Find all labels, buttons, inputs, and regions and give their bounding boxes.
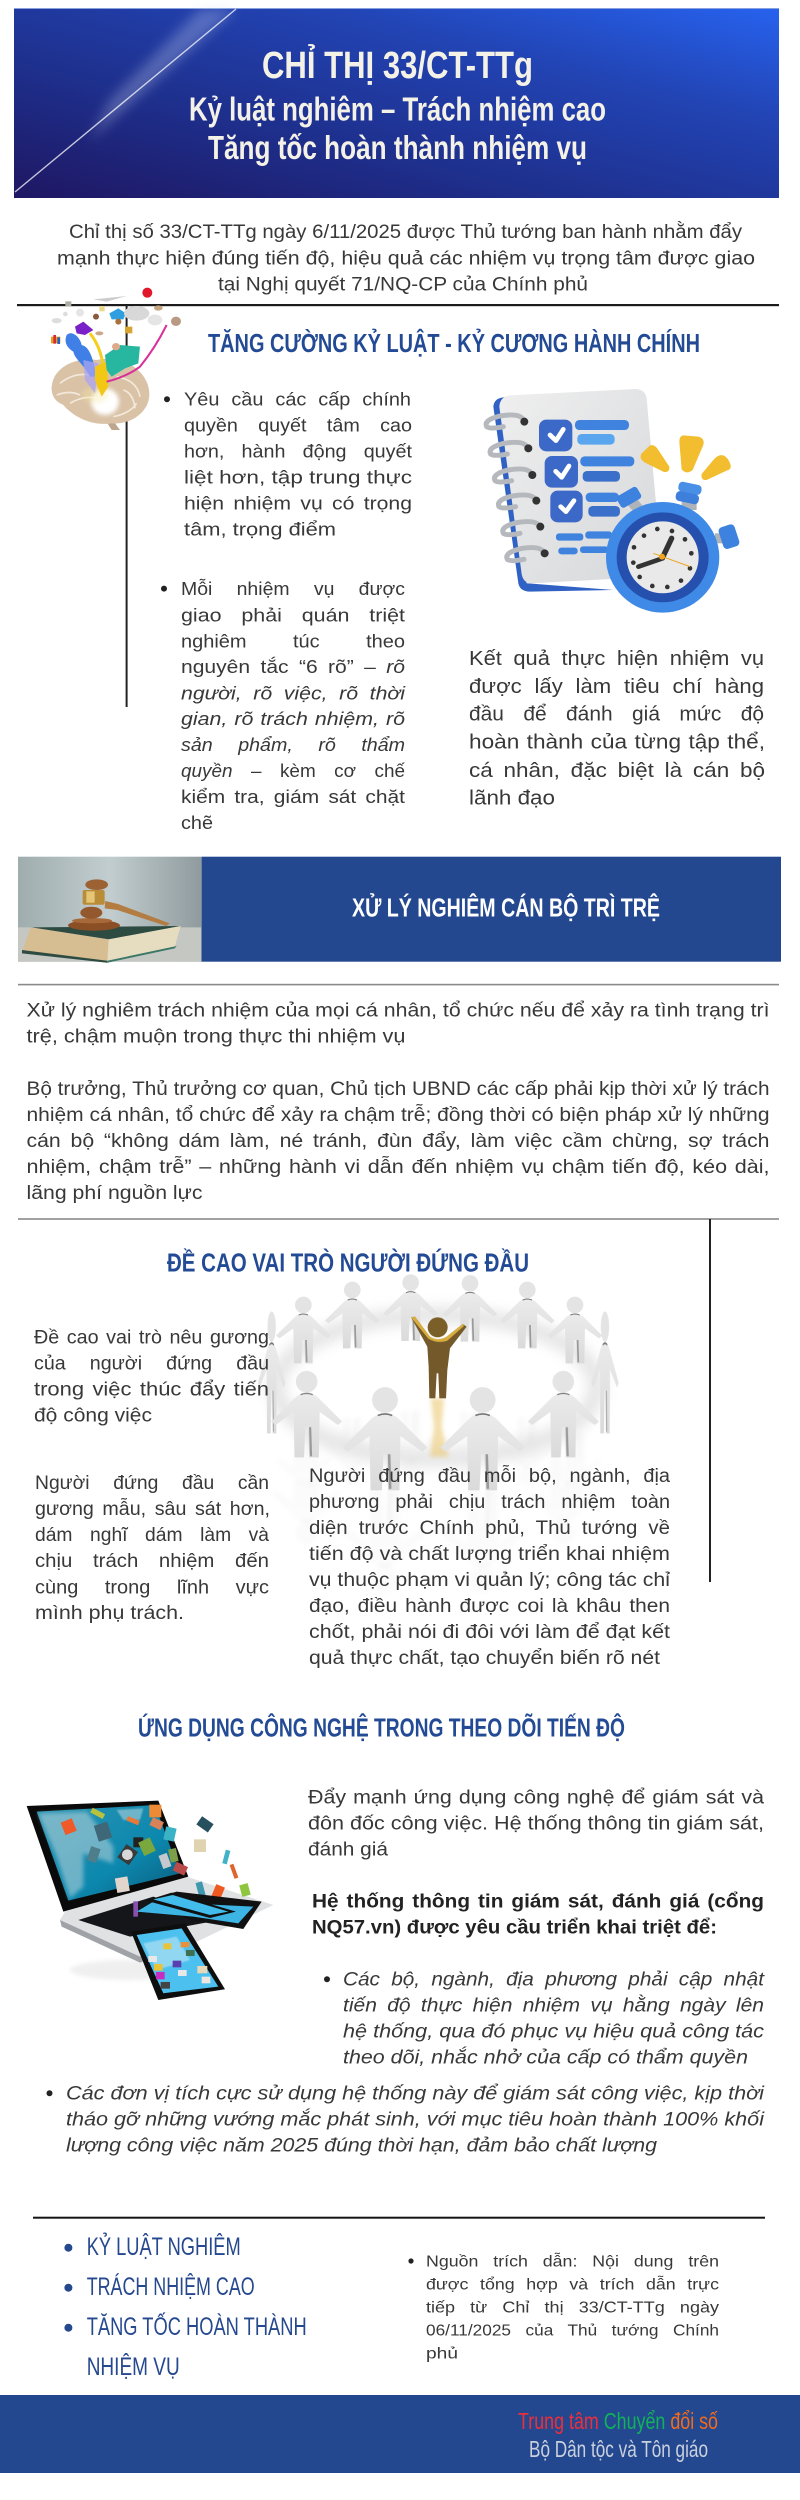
illustration: laptop and phones with app icons	[27, 1801, 273, 2000]
bullet text: leadership resolve: quyền quyết tâm cao	[184, 414, 412, 435]
large phone	[131, 1923, 225, 2000]
bullet text: six clear principle: quyền – kèm cơ chế	[181, 760, 406, 781]
text: strict accountability: cán bộ “không dám làm, né tránh, đùn đẩy, làm việc cầm chừng, sợ trách	[26, 1131, 770, 1152]
text: evaluation criterion: lãnh đạo	[469, 788, 555, 810]
text: strict accountability: Xử lý nghiêm trách nhiệm của mọi cá nhân, tổ chức nếu để xảy ra tình trạng trì	[26, 1001, 769, 1022]
text: evaluation criterion	[469, 648, 765, 810]
bullet text: daily updates: tiến độ thực hiện nhiệm vụ hằng ngày lên	[343, 1995, 764, 2016]
bullet text: six clear principle: kiểm tra, giám sát chặt	[181, 786, 406, 807]
text: responsibility of heads: vụ thuộc phạm vi quản lý; công tác chỉ	[309, 1570, 671, 1591]
text: leaders set example	[35, 1473, 270, 1624]
checklist boxes	[539, 420, 634, 554]
bullet text: six clear principle: giao phải quán triệt	[181, 604, 406, 625]
text: responsibility of heads: Người đứng đầu mỗi bộ, ngành, địa	[309, 1465, 670, 1487]
app icons	[61, 1805, 251, 1917]
heading: section 4: ỨNG DỤNG CÔNG NGHỆ TRONG THEO DÕI TIẾN ĐỘ	[138, 1713, 625, 1743]
text: exemplary role: Đề cao vai trò nêu gương	[34, 1327, 269, 1348]
intro text: Chỉ thị số 33/CT-TTg ngày 6/11/2025 được Thủ tướng ban hành nhằm đẩy	[69, 221, 743, 243]
banner title: Kỷ luật nghiêm – Trách nhiệm cao	[189, 91, 606, 128]
bullet text: daily updates	[324, 1969, 765, 2068]
text: technology monitoring	[308, 1787, 764, 1860]
bullet text: daily updates: hệ thống, qua đó phục vụ hiệu quả công tác	[343, 2021, 765, 2042]
text: evaluation criterion: Kết quả thực hiện nhiệm vụ	[469, 648, 764, 670]
banner title: Tăng tốc hoàn thành nhiệm vụ	[208, 129, 587, 166]
source citation: Nguồn trích dẫn: Nội dung trên	[426, 2252, 719, 2271]
text: strict accountability: lãng phí nguồn lực	[26, 1183, 202, 1204]
banner light streak	[15, 9, 236, 192]
text: leaders set example: dám nghĩ dám làm và	[35, 1525, 269, 1546]
text: strict accountability: trệ, chậm muộn trong thực thi nhiệm vụ	[26, 1027, 406, 1048]
intro text: tại Nghị quyết 71/NQ-CP của Chính phủ	[218, 274, 588, 295]
text: NQ57 system subheading	[312, 1891, 764, 1938]
text: leaders set example: gương mẫu, sâu sát hơn,	[35, 1498, 270, 1520]
illustration: circle of people with gold leader	[258, 1274, 619, 1593]
bullet text: six clear principle	[161, 578, 406, 833]
bullet text: six clear principle: người, rõ việc, rõ thời	[181, 682, 406, 703]
text: leaders set example: cùng trong lĩnh vực	[35, 1577, 269, 1598]
text: evaluation criterion: hoàn thành của từng tập thể,	[469, 732, 765, 754]
banner heading: XỬ LÝ NGHIÊM CÁN BỘ TRÌ TRỆ	[352, 892, 660, 923]
text: leaders set example: chịu trách nhiệm đến	[35, 1551, 269, 1572]
text: strict accountability	[26, 1001, 770, 1204]
bullet text: six clear principle: gian, rõ trách nhiệm, rõ	[181, 708, 405, 729]
intro text	[57, 221, 755, 295]
text: technology monitoring: đánh giá	[308, 1839, 388, 1860]
bullet text: leadership resolve: liệt hơn, tập trung thực	[184, 467, 412, 488]
key message list: NHIỆM VỤ	[87, 2352, 180, 2381]
source citation: 06/11/2025 của Thủ tướng Chính	[426, 2323, 719, 2340]
bullet text: six clear principle: sản phẩm, rõ thẩm	[181, 734, 405, 755]
text: evaluation criterion: đầu để đánh giá mức độ	[469, 704, 764, 726]
text: strict accountability: nhiệm cá nhân, tổ chức để xảy ra chậm trễ; đồng thời có biện pháp xử lý những	[26, 1104, 770, 1126]
bullet text: six clear principle: nghiêm túc theo	[181, 630, 405, 652]
gold leader figure	[411, 1317, 467, 1457]
text: exemplary role: trong việc thúc đẩy tiến	[34, 1379, 269, 1400]
bullet text: leadership resolve: Yêu cầu các cấp chính	[184, 388, 411, 409]
photo: gavel on book	[18, 857, 201, 963]
banner title	[189, 43, 606, 166]
bullet text: six clear principle: nguyên tắc “6 rõ” – rõ	[181, 656, 405, 677]
intro text: mạnh thực hiện đúng tiến độ, hiệu quả các nhiệm vụ trọng tâm được giao	[57, 248, 755, 269]
text: leaders set example: mình phụ trách.	[35, 1603, 184, 1624]
bullet text: leadership resolve: hiện nhiệm vụ có trọng	[184, 493, 412, 514]
text: evaluation criterion: được lấy làm tiêu chí hàng	[469, 676, 764, 698]
icon: brain with colour splash	[51, 288, 181, 430]
bullet text: 100 percent target: Các đơn vị tích cực sử dụng hệ thống này để giám sát công việc, kịp thời	[66, 2083, 765, 2104]
key message list: KỶ LUẬT NGHIÊM	[87, 2231, 241, 2261]
text: responsibility of heads: diện trước Chính phủ, Thủ tướng về	[309, 1518, 670, 1539]
source citation: phủ	[426, 2346, 458, 2363]
bullet text: 100 percent target: tháo gỡ những vướng mắc phát sinh, với mục tiêu hoàn thành 100% khối	[66, 2109, 765, 2130]
text: technology monitoring: đôn đốc công việc. Hệ thống thông tin giám sát,	[308, 1813, 764, 1834]
bullet text: leadership resolve: hơn, hành động quyết	[184, 440, 413, 462]
key message list	[64, 2231, 307, 2381]
text: leaders set example: Người đứng đầu cần	[35, 1473, 269, 1494]
bullet text: daily updates: theo dõi, nhắc nhở của cấp có thẩm quyền	[343, 2047, 748, 2068]
icon: notebook checklist with stopwatch	[486, 389, 740, 613]
header banner	[14, 8, 779, 198]
footer band	[0, 2395, 800, 2473]
small phone	[146, 1893, 236, 1918]
footer organisation name: Trung tâm Chuyển đổi số	[518, 2408, 718, 2434]
text: evaluation criterion: cá nhân, đặc biệt là cán bộ	[469, 760, 765, 782]
text: responsibility of heads: phương phải chịu trách nhiệm toàn	[309, 1492, 670, 1513]
tablet	[137, 1892, 262, 1929]
text: NQ57 system subheading: Hệ thống thông tin giám sát, đánh giá (cổng	[312, 1891, 764, 1912]
text: NQ57 system subheading: NQ57.vn) được yêu cầu triển khai triệt để:	[312, 1917, 717, 1938]
text: responsibility of heads: tiến độ và chất lượng triển khai nhiệm	[309, 1544, 670, 1565]
bullet text: daily updates: Các bộ, ngành, địa phương phải cập nhật	[343, 1969, 765, 1990]
footer ministry name: Bộ Dân tộc và Tôn giáo	[529, 2436, 708, 2462]
stopwatch	[606, 481, 740, 613]
text: responsibility of heads	[309, 1465, 671, 1669]
text: exemplary role: độ công việc	[34, 1405, 152, 1426]
banner title: CHỈ THỊ 33/CT-TTg	[262, 43, 533, 87]
text: exemplary role: của người đứng đầu	[34, 1353, 269, 1374]
source citation: được tổng hợp và trích dẫn trực	[426, 2275, 719, 2294]
bullet text: 100 percent target: lượng công việc năm 2025 đúng thời hạn, đảm bảo chất lượng	[66, 2135, 657, 2156]
text: strict accountability: Bộ trưởng, Thủ trưởng cơ quan, Chủ tịch UBND các cấp phải kịp thời xử lý trách	[26, 1079, 770, 1100]
yellow sparks	[641, 435, 731, 480]
key message list: TĂNG TỐC HOÀN THÀNH	[87, 2311, 307, 2341]
text: responsibility of heads: quả thực chất, tạo chuyển biến rõ nét	[309, 1648, 661, 1669]
text: responsibility of heads: đạo, điều hành được coi là khâu then	[309, 1596, 670, 1617]
bullet text: leadership resolve	[164, 388, 413, 539]
bullet text: leadership resolve: tâm, trọng điểm	[184, 518, 336, 539]
text: strict accountability: nhiệm, chậm trễ” – những hành vi dẫn đến nhiệm vụ chậm tiến độ, kéo dài,	[26, 1156, 770, 1178]
panel: section 2 banner	[18, 857, 781, 963]
text: technology monitoring: Đẩy mạnh ứng dụng công nghệ để giám sát và	[308, 1787, 764, 1808]
bullet text: six clear principle: chẽ	[181, 812, 213, 833]
bullet text: 100 percent target	[46, 2083, 765, 2156]
text: exemplary role	[34, 1327, 269, 1426]
text: responsibility of heads: chốt, phải nói đi đôi với làm để đạt kết	[309, 1622, 671, 1643]
key message list: TRÁCH NHIỆM CAO	[87, 2272, 255, 2301]
heading: section 3: ĐỀ CAO VAI TRÒ NGƯỜI ĐỨNG ĐẦU	[167, 1248, 529, 1278]
bullet text: six clear principle: Mỗi nhiệm vụ được	[181, 578, 405, 599]
source citation	[408, 2252, 719, 2363]
source citation: tiếp từ Chỉ thị 33/CT-TTg ngày	[426, 2300, 719, 2317]
